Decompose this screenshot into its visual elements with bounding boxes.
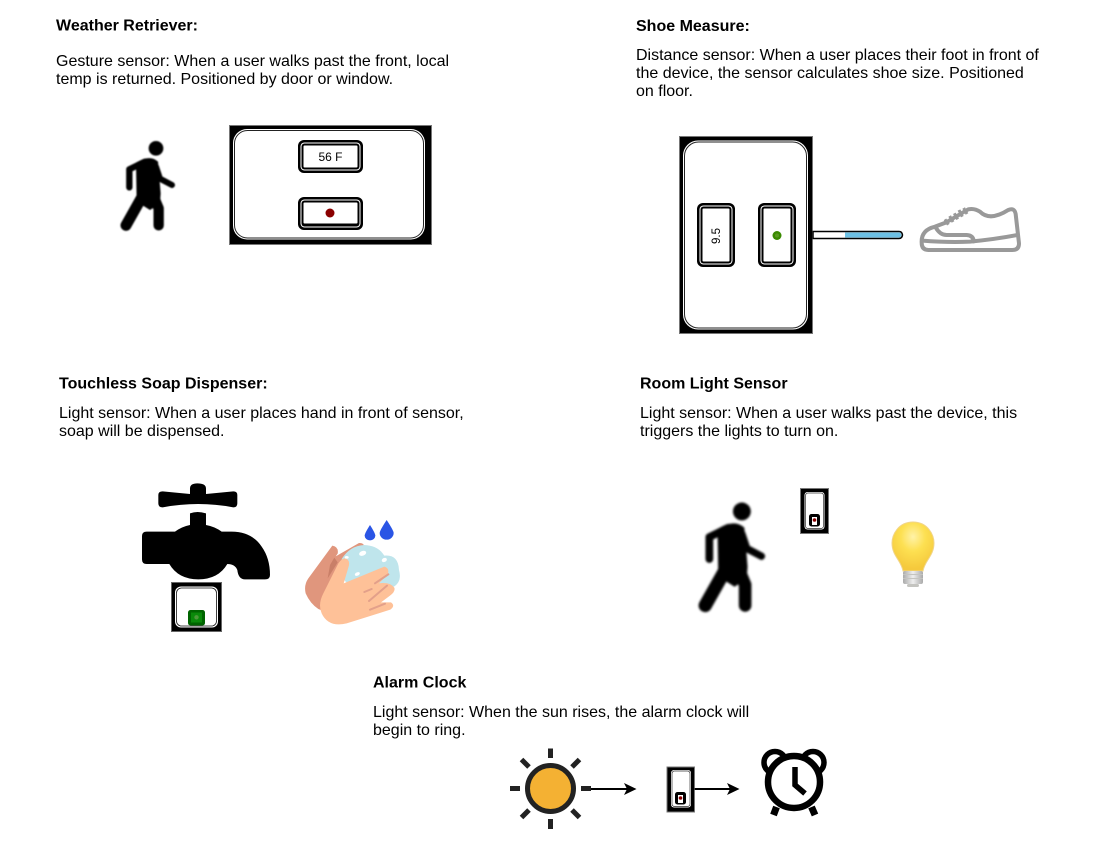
icon: alarm clock bbox=[764, 752, 824, 815]
display: 56 F: 56 F bbox=[318, 150, 343, 164]
indicator: green button bbox=[188, 610, 205, 626]
display: 9.5 bbox=[697, 203, 735, 267]
text: alarm clock description: Light sensor: When the sun rises, the alarm clock will bbox=[373, 704, 749, 721]
text: shoe measure description: on floor. bbox=[636, 83, 693, 100]
device: alarm sensor bbox=[667, 767, 694, 812]
display: 56 F bbox=[298, 140, 363, 173]
icon: sun bbox=[510, 748, 591, 829]
arrow: sun to sensor bbox=[591, 783, 636, 795]
text: soap dispenser description: soap will be dispensed. bbox=[59, 423, 224, 440]
heading: alarm clock: Alarm Clock bbox=[373, 674, 466, 692]
text: weather retriever description: temp is returned. Positioned by door or window. bbox=[56, 71, 393, 88]
device: soap sensor bbox=[172, 582, 222, 632]
heading: weather retriever: Weather Retriever: bbox=[56, 18, 198, 34]
text: weather retriever description: Gesture sensor: When a user walks past the front, local bbox=[56, 53, 449, 70]
device: weather retriever bbox=[230, 126, 432, 244]
panel: touchless soap dispenser bbox=[59, 376, 464, 632]
text: soap dispenser description: Light sensor: When a user places hand in front of sensor, bbox=[59, 405, 464, 422]
panel: room light sensor bbox=[640, 376, 1017, 605]
indicator: red LED bbox=[298, 197, 363, 230]
icon: washing hands bbox=[305, 520, 400, 624]
display: 9.5: 9.5 bbox=[711, 228, 723, 244]
device: shoe measure bbox=[680, 136, 812, 334]
text: shoe measure description: Distance sensor: When a user places their foot in front of bbox=[636, 47, 1039, 64]
device: room light sensor bbox=[800, 488, 828, 534]
heading: touchless soap dispenser: Touchless Soap Dispenser: bbox=[59, 376, 268, 392]
indicator: green LED bbox=[758, 203, 796, 267]
text: shoe measure description: the device, the sensor calculates shoe size. Positioned bbox=[636, 65, 1024, 82]
icon: shoe bbox=[922, 208, 1019, 250]
panel: weather retriever bbox=[56, 18, 449, 244]
sensor beam bbox=[813, 232, 902, 238]
text: alarm clock description: begin to ring. bbox=[373, 722, 466, 739]
text: room light description: Light sensor: When a user walks past the device, this bbox=[640, 405, 1017, 422]
icon: faucet bbox=[142, 483, 270, 579]
arrow: sensor to clock bbox=[694, 783, 740, 795]
icon: light bulb bbox=[892, 522, 934, 587]
panel: alarm clock bbox=[373, 674, 824, 829]
icon: walking person bbox=[126, 141, 172, 225]
panel: shoe measure bbox=[636, 18, 1039, 334]
heading: shoe measure: Shoe Measure: bbox=[636, 18, 750, 35]
icon: walking person bbox=[705, 503, 761, 605]
text: room light description: triggers the lights to turn on. bbox=[640, 423, 838, 440]
heading: room light sensor: Room Light Sensor bbox=[640, 376, 788, 392]
